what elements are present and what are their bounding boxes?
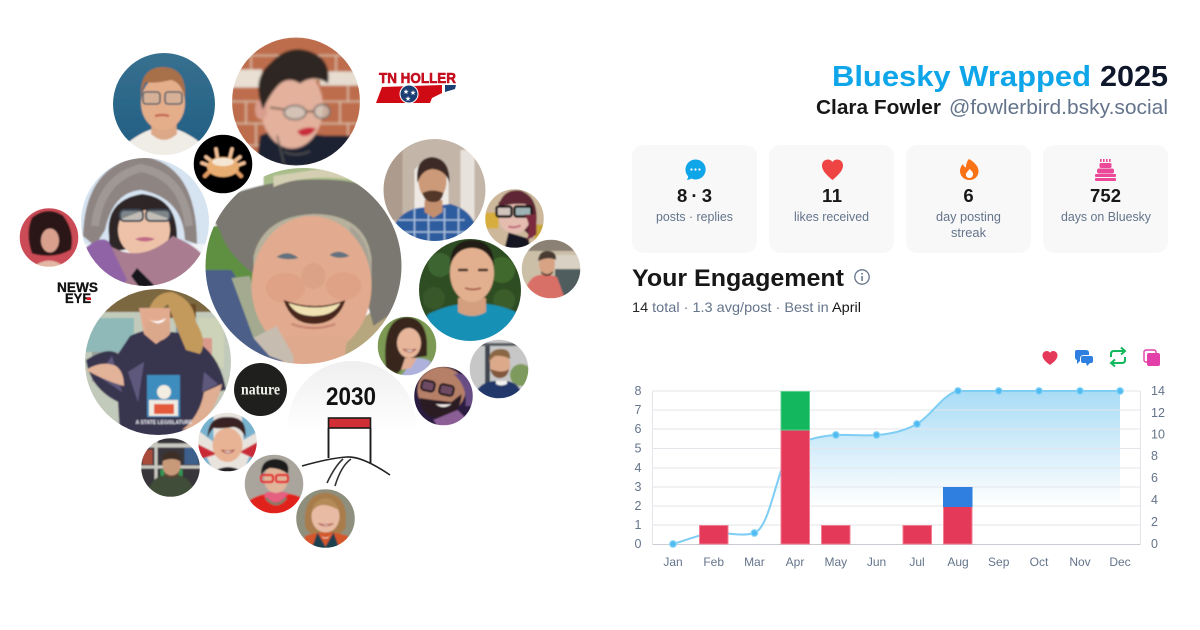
chart: monthly engagement [635, 384, 1165, 569]
avatar: woman in fur hood [80, 156, 210, 292]
logo: News Eye: EYE [65, 290, 91, 306]
cumulative line [673, 391, 1120, 544]
icon: info [855, 270, 869, 284]
avatar cluster [19, 36, 581, 548]
month labels: Mar [744, 555, 765, 569]
month labels: May [824, 555, 847, 569]
left axis labels: 8 [635, 384, 642, 398]
month labels: Jun [867, 555, 886, 569]
month labels: Nov [1069, 555, 1091, 569]
panel: days on Bluesky: 752 [1090, 185, 1121, 206]
month labels: Feb [703, 555, 724, 569]
month labels: Dec [1109, 555, 1131, 569]
avatar: Nature logo: nature [241, 382, 280, 398]
month labels: Aug [947, 555, 969, 569]
panel: posts and replies [632, 145, 757, 253]
left axis labels: 4 [635, 461, 642, 475]
avatar: woman with long dark hair [377, 316, 437, 376]
avatar: man in coral shirt in a hall [521, 239, 581, 299]
heading: Your Engagement: Your Engagement [632, 265, 844, 292]
panel: posts and replies: 8 · 3 [677, 185, 712, 206]
avatar: woman with dark short hair on flag background [198, 412, 258, 472]
icon: speech bubble [685, 159, 706, 180]
engagement summary: 14 total · 1.3 avg/post · Best in April [632, 299, 861, 315]
panel: posting streak [906, 145, 1031, 253]
right axis labels: 10 [1151, 428, 1165, 442]
icon: heart [822, 160, 843, 180]
logo: TN Holler: ★ [403, 88, 409, 96]
avatar: man with green foliage and teal shirt [418, 238, 522, 342]
right axis labels: 4 [1151, 493, 1158, 507]
panel: posting streak: day posting [936, 210, 1001, 224]
avatar: 2030 finish-line sketch [288, 361, 416, 489]
left axis labels: 3 [635, 480, 642, 494]
avatar: man in plaid shirt under arches [382, 138, 486, 245]
right axis labels: 8 [1151, 449, 1158, 463]
icon: flame [960, 159, 979, 180]
stacked bars [700, 392, 972, 544]
right axis labels: 2 [1151, 515, 1158, 529]
month labels: Jul [909, 555, 925, 569]
avatar: central smiling woman in wide-brim hat [204, 167, 402, 365]
right axis labels: 12 [1151, 406, 1165, 420]
panel: posting streak: streak [951, 226, 987, 240]
legend icons [1042, 348, 1160, 366]
left axis labels: 1 [635, 518, 642, 532]
user name and handle: @fowlerbird.bsky.social [949, 97, 1168, 119]
left axis labels: 2 [635, 499, 642, 513]
panel: likes received [769, 145, 894, 253]
right axis labels: 14 [1151, 384, 1165, 398]
month labels [663, 555, 1131, 569]
panel: posts and replies: posts · replies [656, 210, 733, 224]
logo: TN Holler [376, 71, 456, 103]
left axis labels: 5 [635, 442, 642, 456]
avatar: 2030 finish-line sketch: 2030 [326, 383, 376, 411]
avatar: woman with short dark hair against brick wall [231, 36, 361, 168]
icon: repost [1111, 348, 1125, 366]
left axis labels: 7 [635, 403, 642, 417]
right axis labels: 0 [1151, 537, 1158, 551]
user name and handle: Clara Fowler [816, 97, 941, 119]
title: 2025 [1100, 61, 1168, 93]
avatar: woman with light auburn bob [296, 488, 356, 548]
avatar: woman with black glasses and red hair [484, 188, 544, 248]
left axis labels [635, 384, 642, 551]
month labels: Oct [1030, 555, 1049, 569]
right axis labels: 6 [1151, 471, 1158, 485]
right axis labels [1151, 384, 1165, 551]
user name and handle [816, 97, 1168, 119]
icon: reply [1075, 350, 1093, 366]
avatar: blond woman with sweatshirt [84, 288, 232, 436]
month labels: Apr [786, 555, 804, 569]
logo: TN Holler: ★ [405, 95, 411, 103]
left axis labels: 0 [635, 537, 642, 551]
icon: cake [1095, 159, 1116, 181]
logo: News Eye: NEWS [57, 279, 98, 295]
panel: likes received: 11 [822, 185, 842, 206]
month labels: Sep [988, 555, 1010, 569]
line markers [670, 388, 1123, 547]
panel: posting streak: 6 [963, 185, 974, 206]
left axis labels: 6 [635, 422, 642, 436]
avatar: woman with red glasses [244, 454, 304, 514]
logo: News Eye [57, 279, 98, 306]
avatar: axolotl on black [193, 134, 253, 194]
panel: days on Bluesky: days on Bluesky [1061, 210, 1152, 224]
icon: quote [1144, 350, 1160, 366]
avatar: man in front of bookshelves [140, 438, 200, 498]
icon: like [1042, 351, 1058, 365]
cumulative area [673, 391, 1120, 544]
avatar: man in navy sweater [469, 339, 532, 399]
avatar: blond woman with sweatshirt: A STATE LEGISLATURE [136, 420, 193, 426]
logo: TN Holler: ★ [410, 89, 416, 97]
panel: days on Bluesky [1043, 145, 1168, 253]
avatar: bald man with glasses in purple tones [414, 366, 474, 426]
logo: TN Holler: TN HOLLER [379, 71, 456, 87]
title: Bluesky Wrapped [832, 61, 1091, 93]
avatar: woman with curly dark hair on red [19, 208, 79, 270]
month labels: Jan [663, 555, 683, 569]
avatar: man with glasses on blue background [112, 52, 216, 159]
panel: likes received: likes received [794, 210, 869, 224]
avatar: Nature logo [234, 363, 287, 416]
